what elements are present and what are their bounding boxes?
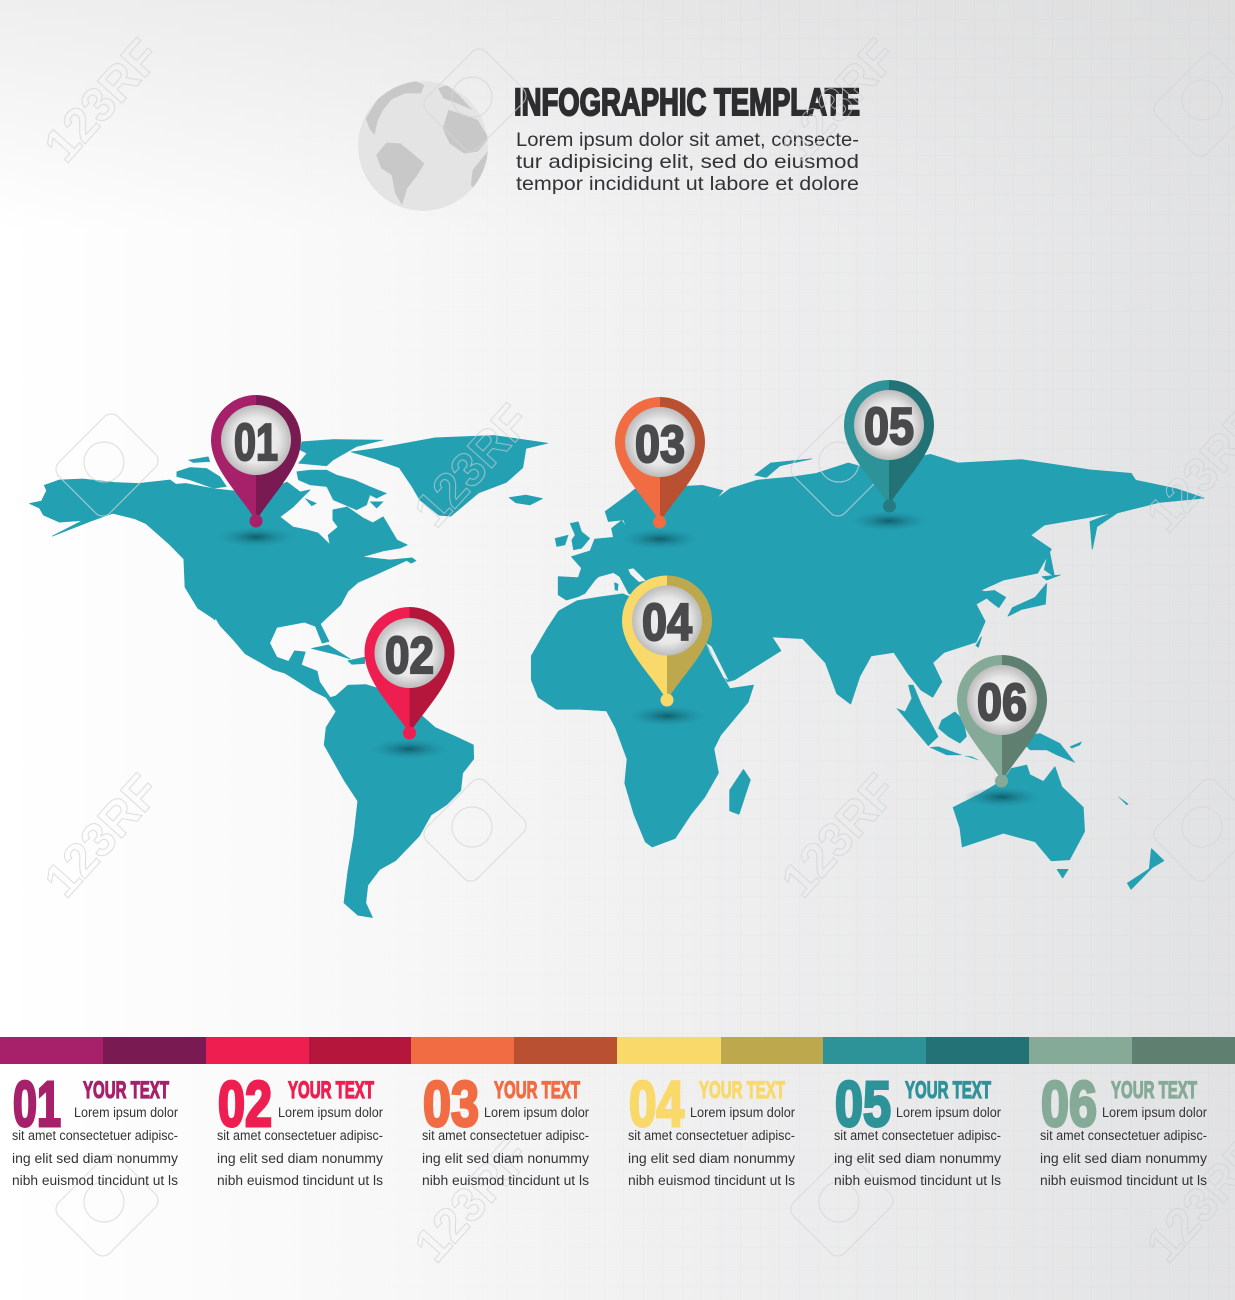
title: INFOGRAPHIC TEMPLATE	[514, 82, 860, 124]
watermark: 123RF	[35, 30, 171, 172]
item 04: ing elit sed diam nonummy	[628, 1151, 795, 1166]
item 03: nibh euismod tincidunt ut ls	[422, 1173, 589, 1188]
item 05	[834, 1068, 1001, 1188]
item 04: sit amet consectetuer adipisc-	[628, 1128, 795, 1143]
item 01: Lorem ipsum dolor	[74, 1105, 178, 1120]
watermark: 123RF	[405, 1130, 541, 1272]
pin 06: 06	[977, 674, 1027, 732]
item 02: nibh euismod tincidunt ut ls	[217, 1173, 383, 1188]
southeast asia details	[897, 685, 1128, 805]
item 04: Lorem ipsum dolor	[690, 1105, 795, 1120]
item 01: 01	[13, 1068, 61, 1140]
item 02	[217, 1068, 383, 1188]
item 01	[12, 1068, 178, 1188]
item 02: 02	[218, 1068, 272, 1140]
item 01: nibh euismod tincidunt ut ls	[12, 1173, 178, 1188]
item 04: nibh euismod tincidunt ut ls	[628, 1173, 795, 1188]
item 02: YOUR TEXT	[288, 1077, 374, 1104]
pin 03	[615, 397, 705, 549]
intro text: tur adipisicing elit, sed do eiusmod	[516, 151, 859, 173]
pin 06	[957, 655, 1047, 807]
pin 04	[622, 576, 712, 726]
globe icon	[358, 81, 492, 211]
item 05: sit amet consectetuer adipisc-	[834, 1128, 1001, 1143]
pin 02	[364, 607, 454, 759]
item 01: YOUR TEXT	[83, 1077, 169, 1104]
pin 01: 01	[234, 414, 278, 472]
item 04	[628, 1068, 795, 1188]
item 03: 03	[423, 1068, 479, 1140]
pin 02: 02	[385, 627, 434, 685]
eurasia africa australia	[531, 454, 1204, 889]
item 05: YOUR TEXT	[905, 1077, 991, 1104]
item 03	[422, 1068, 589, 1188]
item 03: YOUR TEXT	[494, 1077, 580, 1104]
item 04: YOUR TEXT	[699, 1077, 785, 1104]
world map	[30, 435, 1204, 918]
item 06: ing elit sed diam nonummy	[1040, 1151, 1207, 1166]
intro text	[516, 129, 859, 195]
item 05: nibh euismod tincidunt ut ls	[834, 1173, 1001, 1188]
pin 05	[844, 380, 934, 531]
item 02: Lorem ipsum dolor	[278, 1105, 383, 1120]
intro text: tempor incididunt ut labore et dolore	[516, 173, 859, 195]
pin 04: 04	[642, 594, 692, 652]
item 01: sit amet consectetuer adipisc-	[12, 1128, 178, 1143]
pin 01	[211, 395, 301, 547]
item 06: sit amet consectetuer adipisc-	[1040, 1128, 1207, 1143]
item 04: 04	[629, 1068, 684, 1140]
watermark: 123RF	[772, 765, 908, 907]
item 03: sit amet consectetuer adipisc-	[422, 1128, 589, 1143]
pin 05: 05	[864, 398, 914, 456]
item 02: sit amet consectetuer adipisc-	[217, 1128, 383, 1143]
item 05: 05	[835, 1068, 891, 1140]
item 03: ing elit sed diam nonummy	[422, 1151, 589, 1166]
item 06: 06	[1041, 1068, 1097, 1140]
western europe details	[555, 522, 728, 680]
item 05: ing elit sed diam nonummy	[834, 1151, 1001, 1166]
item 05: Lorem ipsum dolor	[896, 1105, 1001, 1120]
colour bar	[0, 1037, 1235, 1064]
americas	[30, 435, 548, 918]
canadian arctic islands	[177, 439, 387, 510]
pin 03: 03	[635, 416, 685, 474]
item 06	[1040, 1068, 1207, 1188]
item 03: Lorem ipsum dolor	[484, 1105, 589, 1120]
intro text: Lorem ipsum dolor sit amet, consecte-	[516, 129, 859, 151]
watermark: 123RF	[35, 765, 171, 907]
watermark: 123RF	[772, 30, 908, 172]
watermark: 123RF	[405, 395, 541, 537]
item 06: nibh euismod tincidunt ut ls	[1040, 1173, 1207, 1188]
item 01: ing elit sed diam nonummy	[12, 1151, 178, 1166]
item 02: ing elit sed diam nonummy	[217, 1151, 383, 1166]
item 06: Lorem ipsum dolor	[1102, 1105, 1207, 1120]
